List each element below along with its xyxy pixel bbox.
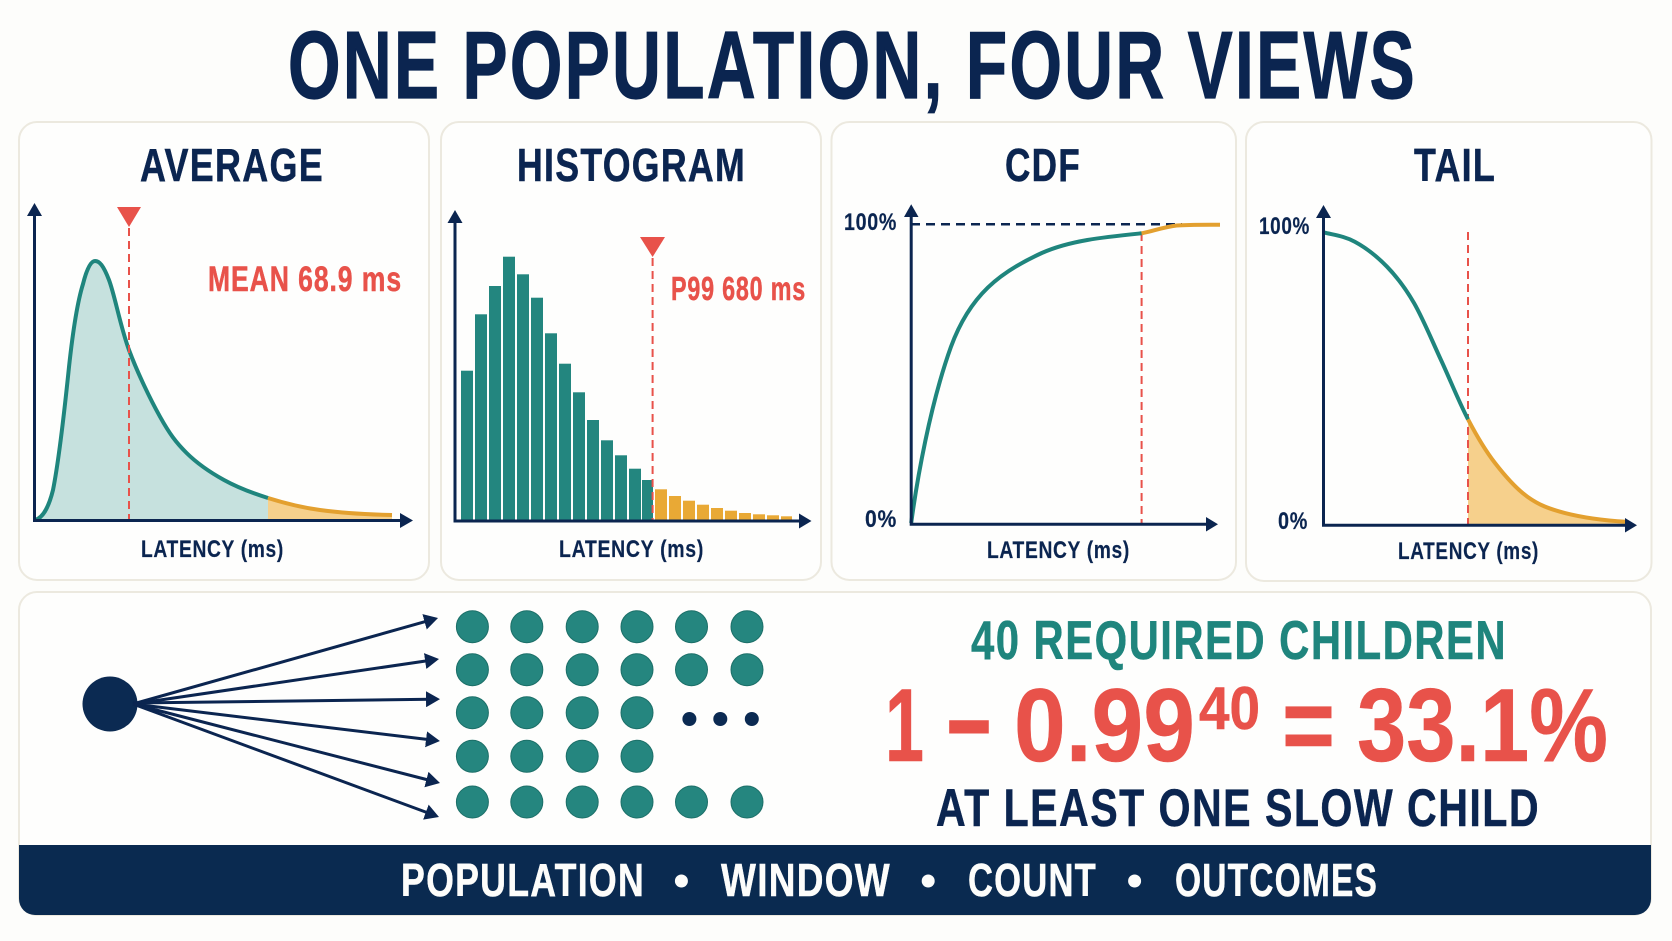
- text: required children: 40 REQUIRED CHILDREN: [971, 609, 1507, 671]
- bullet: [675, 874, 688, 888]
- label: p99 value: P99 680 ms: [671, 270, 806, 307]
- panel: fan-out and formula: [19, 592, 1651, 915]
- formula: [885, 662, 1608, 784]
- chart: tail survival curve: [1316, 205, 1637, 532]
- axis label: LATENCY (ms): [559, 536, 704, 563]
- heading: histogram: HISTOGRAM: [517, 139, 746, 191]
- axis label: LATENCY (ms): [141, 536, 284, 563]
- icon: p99 marker: [640, 237, 665, 257]
- chart: density curve with mean marker: [27, 203, 413, 528]
- label: 0 percent: 0%: [1278, 508, 1308, 535]
- formula: 1: [885, 668, 924, 784]
- icon: mean marker: [117, 207, 141, 227]
- icon: ellipsis: [682, 712, 759, 726]
- axis label: LATENCY (ms): [1398, 538, 1539, 565]
- chart: histogram bars: [448, 210, 812, 528]
- heading: cdf: CDF: [1005, 139, 1081, 191]
- formula: 0.99: [1014, 668, 1195, 784]
- label: 100 percent: 100%: [844, 209, 897, 236]
- heading: average: AVERAGE: [140, 139, 324, 191]
- bullet: [922, 874, 935, 888]
- footer: population: POPULATION: [401, 854, 645, 906]
- heading: tail: TAIL: [1414, 139, 1496, 191]
- chart: cumulative curve: [904, 204, 1220, 532]
- icon: parent node: [82, 676, 138, 732]
- panel: tail: [1246, 122, 1652, 581]
- panel: average: [19, 122, 429, 580]
- formula: =: [1282, 668, 1335, 784]
- dot grid: child requests: [456, 611, 763, 818]
- bullet: [1128, 874, 1141, 888]
- formula: 40: [1199, 675, 1260, 742]
- footer: count: COUNT: [968, 854, 1097, 906]
- formula: –: [948, 662, 990, 778]
- footer: window: WINDOW: [721, 854, 891, 906]
- axis label: LATENCY (ms): [987, 537, 1130, 564]
- formula: 33.1%: [1357, 668, 1608, 784]
- label: mean value: MEAN 68.9 ms: [208, 260, 402, 299]
- panel: cdf: [832, 122, 1236, 580]
- footer band: [19, 845, 1651, 915]
- footer: outcomes: OUTCOMES: [1175, 854, 1378, 906]
- label: 100 percent: 100%: [1259, 213, 1310, 240]
- panel: histogram: [441, 122, 821, 580]
- label: 0 percent: 0%: [865, 506, 897, 533]
- arrows: fan-out to children: [133, 621, 430, 814]
